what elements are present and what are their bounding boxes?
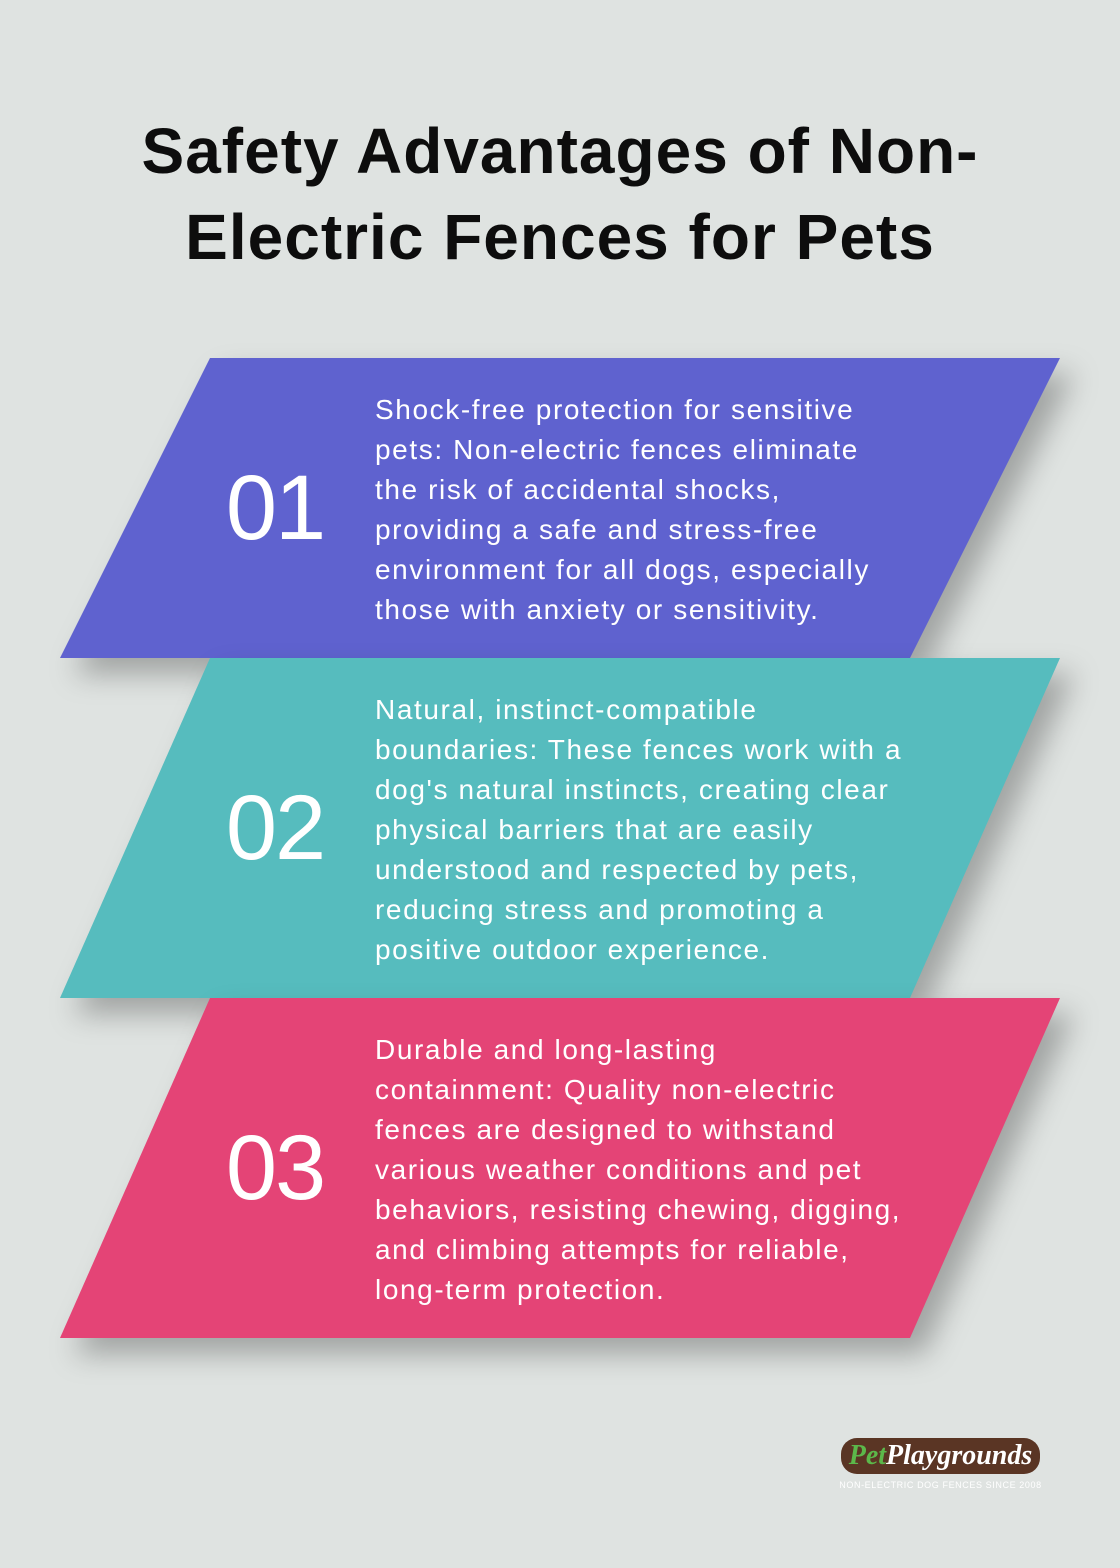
logo: PetPlaygrounds [849, 1440, 1032, 1471]
text 03: various weather conditions and pet [375, 1154, 862, 1185]
text 02: reducing stress and promoting a [375, 894, 825, 925]
text 01: the risk of accidental shocks, [375, 474, 781, 505]
text 02: understood and respected by pets, [375, 854, 859, 885]
logo: NON-ELECTRIC DOG FENCES SINCE 2008 [839, 1480, 1042, 1490]
text 03: containment: Quality non-electric [375, 1074, 836, 1105]
title [142, 115, 978, 273]
text 02: Natural, instinct-compatible [375, 694, 758, 725]
number 01: 01 [226, 457, 324, 559]
text 03: long-term protection. [375, 1274, 665, 1305]
text 02 [375, 694, 902, 965]
title: Electric Fences for Pets [185, 201, 935, 273]
text 01: pets: Non-electric fences eliminate [375, 434, 859, 465]
number 03: 03 [226, 1117, 324, 1219]
number 02: 02 [226, 777, 324, 879]
text 02: positive outdoor experience. [375, 934, 770, 965]
panel: 01 [60, 358, 1080, 689]
text 02: boundaries: These fences work with a [375, 734, 902, 765]
text 01: those with anxiety or sensitivity. [375, 594, 820, 625]
text 03: Durable and long-lasting [375, 1034, 717, 1065]
text 01: environment for all dogs, especially [375, 554, 870, 585]
text 01: providing a safe and stress-free [375, 514, 818, 545]
panel: 03 [60, 998, 1080, 1369]
panel: 02 [60, 658, 1080, 1029]
logo [839, 1438, 1042, 1490]
text 03: behaviors, resisting chewing, digging, [375, 1194, 901, 1225]
text 01: Shock-free protection for sensitive [375, 394, 854, 425]
text 03 [375, 1034, 901, 1305]
text 02: physical barriers that are easily [375, 814, 814, 845]
title: Safety Advantages of Non- [142, 115, 978, 187]
text 02: dog's natural instincts, creating clear [375, 774, 889, 805]
text 03: fences are designed to withstand [375, 1114, 836, 1145]
text 03: and climbing attempts for reliable, [375, 1234, 850, 1265]
text 01 [375, 394, 870, 625]
